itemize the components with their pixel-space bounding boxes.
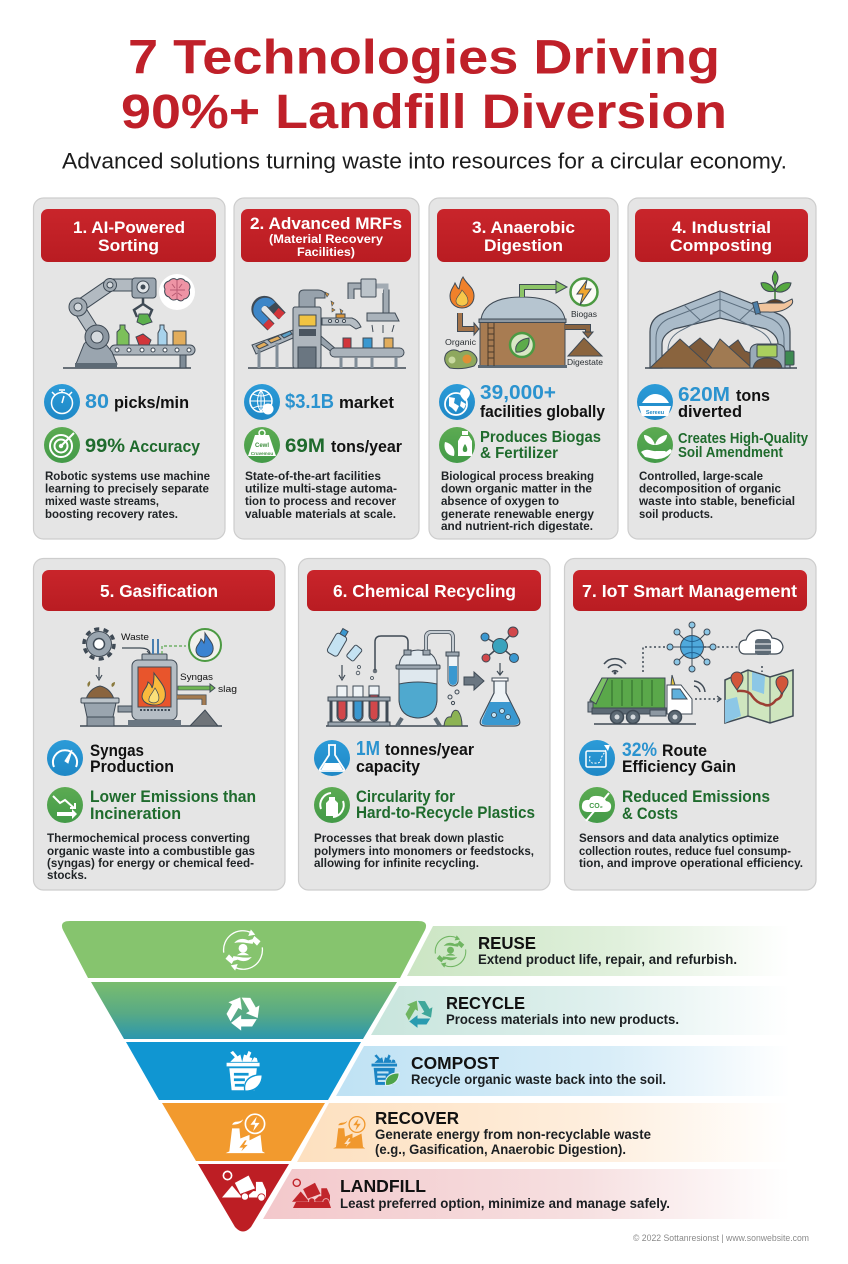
heading: IoT Smart Management — [573, 570, 807, 611]
illustration: gasifier furnace: Syngas — [180, 672, 213, 683]
heading: Anaerobic Digestion: Digestion — [484, 236, 563, 255]
description: tion, and improve operational efficiency. — [579, 856, 803, 870]
illustration: anaerobic digester tank — [445, 277, 603, 369]
stat: 32% Route Efficiency Gain: Route — [662, 741, 707, 760]
level: RECYCLE: RECYCLE — [446, 993, 525, 1013]
heading: Advanced MRFs: 2. Advanced MRFs — [250, 214, 402, 233]
stat: 1M tonnes/year capacity: tonnes/year — [385, 740, 474, 759]
level: RECOVER: RECOVER — [375, 1108, 459, 1128]
stat: 80 picks/min: picks/min — [114, 393, 189, 412]
panel: 7. IoT Smart Management — [564, 558, 816, 890]
description — [314, 831, 534, 870]
description: Biological process breaking — [441, 469, 594, 483]
description — [441, 469, 594, 533]
panel: 2. Advanced MRFs — [234, 198, 419, 539]
illustration: material recovery facility — [248, 279, 406, 368]
stat: 99% Accuracy: 99% — [85, 435, 125, 457]
stat: Circularity for Hard-to-Recycle Plastics: Hard-to-Recycle Plastics — [356, 804, 535, 822]
stat: 620M tons diverted: 620M — [678, 384, 730, 406]
stat: Produces Biogas & Fertilizer — [439, 427, 601, 463]
stat: 1M tonnes/year capacity: capacity — [356, 757, 421, 776]
stat: Syngas Production — [47, 740, 174, 776]
stat: 69M tons/year: 69M — [285, 435, 325, 457]
stat: 620M tons diverted — [637, 384, 770, 421]
heading: Advanced MRFs — [241, 209, 411, 262]
description: allowing for infinite recycling. — [314, 856, 479, 870]
stat: Creates High-Quality Soil Amendment: Soil Amendment — [678, 445, 783, 461]
band: recycle — [91, 982, 397, 1039]
description: utilize multi-stage automa- — [245, 482, 397, 496]
stat: 32% Route Efficiency Gain: 32% — [622, 740, 657, 761]
level: RECOVER — [297, 1103, 790, 1162]
stat: Reduced Emissions & Costs: Reduced Emissions — [622, 788, 770, 806]
footer: © 2022 Sottanresionst | www.sonwebsite.com — [633, 1233, 809, 1244]
illustration: gasifier furnace — [80, 629, 237, 726]
stat: 80 picks/min — [44, 384, 189, 420]
description: State-of-the-art facilities — [245, 469, 381, 483]
stat: 69M tons/year: Cewl — [255, 443, 269, 449]
illustration: gasifier furnace: slag — [218, 684, 237, 695]
illustration: anaerobic digester tank: Organic — [445, 337, 477, 347]
level: RECOVER: Generate energy from non-recyclable waste — [375, 1126, 651, 1142]
heading: Chemical Recycling: 6. Chemical Recycling — [333, 581, 516, 601]
stat: $3.1B market: market — [339, 393, 394, 412]
title — [121, 30, 727, 139]
stat: 80 picks/min: 80 — [85, 391, 109, 413]
illustration: robot arm sorting on conveyor — [63, 274, 195, 368]
description: Processes that break down plastic — [314, 831, 504, 845]
heading: Industrial Composting — [635, 209, 808, 262]
description: soil products. — [639, 507, 713, 521]
stat: $3.1B market — [244, 384, 394, 420]
description: Thermochemical process converting — [47, 831, 250, 845]
level: LANDFILL: Least preferred option, minimize and manage safely. — [340, 1195, 670, 1211]
stat: 99% Accuracy: Accuracy — [129, 438, 201, 456]
stat: Reduced Emissions & Costs: & Costs — [622, 805, 678, 823]
level: COMPOST: COMPOST — [411, 1053, 499, 1073]
band: reuse — [62, 921, 426, 978]
description: waste into stable, beneficial — [638, 494, 795, 508]
description: Robotic systems use machine — [45, 469, 210, 483]
stat: 39,000+ facilities globally: facilities globally — [480, 402, 605, 421]
level: RECYCLE — [371, 986, 790, 1035]
level: REUSE: REUSE — [478, 933, 536, 953]
stat: Creates High-Quality Soil Amendment — [637, 427, 808, 463]
description — [579, 831, 803, 870]
description — [638, 469, 795, 521]
stat: Produces Biogas & Fertilizer: & Fertilizer — [480, 445, 558, 462]
panel: 5. Gasification — [34, 558, 285, 890]
heading: Gasification — [42, 570, 275, 611]
illustration: compost hangar with plant in hand — [645, 271, 797, 368]
title: 7 Technologies Driving — [128, 30, 720, 84]
stat: Lower Emissions than Incineration — [47, 787, 256, 823]
level: COMPOST: Recycle organic waste back into the soil. — [411, 1071, 666, 1087]
heading: Advanced MRFs: Facilities) — [297, 245, 355, 259]
band: landfill — [198, 1164, 289, 1232]
stat: Circularity for Hard-to-Recycle Plastics: Circularity for — [356, 788, 456, 806]
heading: Anaerobic Digestion — [437, 209, 610, 262]
stat: 69M tons/year — [244, 427, 402, 463]
illustration: anaerobic digester tank: Biogas — [571, 309, 597, 319]
stat: 1M tonnes/year capacity: 1M — [356, 738, 380, 760]
panel: 1. AI-Powered Sorting — [34, 198, 225, 539]
heading: Chemical Recycling — [307, 570, 541, 611]
stat: Reduced Emissions & Costs: CO₂ — [589, 803, 603, 810]
panel: 4. Industrial Composting — [628, 198, 816, 539]
description: Controlled, large-scale — [639, 469, 763, 483]
stat: Syngas Production: Syngas — [90, 741, 144, 760]
stat: Circularity for Hard-to-Recycle Plastics — [314, 787, 535, 823]
level: LANDFILL — [263, 1169, 790, 1219]
stat: Syngas Production: Production — [90, 757, 174, 776]
description: absence of oxygen to — [441, 494, 559, 508]
heading: Industrial Composting: 4. Industrial — [672, 218, 771, 237]
illustration: anaerobic digester tank: Digestate — [567, 357, 603, 367]
stat: 620M tons diverted: tons — [736, 386, 770, 405]
description: collection routes, reduce fuel consump- — [579, 844, 791, 858]
description: tion to process and recover — [245, 494, 396, 508]
stat: 69M tons/year: Cruvemou — [251, 451, 273, 456]
panel: 3. Anaerobic Digestion — [429, 198, 618, 539]
level: REUSE — [407, 926, 790, 976]
stat: Produces Biogas & Fertilizer: Produces Biogas — [480, 429, 601, 446]
description: learning to precisely separate — [45, 482, 209, 496]
stat: 620M tons diverted: diverted — [678, 402, 742, 421]
description: generate renewable energy — [441, 507, 594, 521]
chart: waste hierarchy inverted pyramid — [62, 921, 426, 1232]
heading: Anaerobic Digestion: 3. Anaerobic — [472, 218, 575, 237]
stat: 99% Accuracy — [44, 427, 201, 463]
description — [245, 469, 397, 521]
description: organic waste into a combustible gas — [47, 844, 255, 858]
heading: Advanced MRFs: (Material Recovery — [269, 232, 383, 246]
level: COMPOST — [336, 1046, 790, 1096]
description — [45, 469, 210, 521]
level: RECOVER: (e.g., Gasification, Anaerobic Digestion). — [375, 1141, 626, 1157]
illustration: chemical reactor and molecule — [326, 627, 520, 726]
panel: 6. Chemical Recycling — [298, 558, 550, 890]
stat: Creates High-Quality Soil Amendment: Creates High-Quality — [678, 431, 808, 447]
stat: 69M tons/year: tons/year — [331, 437, 402, 456]
description: polymers into monomers or feedstocks, — [314, 844, 534, 858]
stat: 1M tonnes/year capacity — [314, 738, 474, 776]
description: valuable materials at scale. — [245, 507, 396, 521]
heading: AI-Powered Sorting — [41, 209, 216, 262]
title: 90%+ Landfill Diversion — [121, 85, 727, 139]
stat: 39,000+ facilities globally: 39,000+ — [480, 382, 556, 404]
heading: AI-Powered Sorting: Sorting — [98, 236, 159, 255]
stat: 32% Route Efficiency Gain: Efficiency Gain — [622, 757, 736, 776]
band: compost — [126, 1042, 361, 1100]
heading: Gasification: 5. Gasification — [100, 581, 218, 601]
description: and nutrient-rich digestate. — [441, 519, 593, 533]
description: mixed waste streams, — [45, 494, 159, 508]
description: Sensors and data analytics optimize — [579, 831, 779, 845]
illustration: smart garbage truck and route map — [588, 622, 793, 724]
description: down organic matter in the — [441, 482, 592, 496]
illustration: gasifier furnace: Waste — [121, 632, 149, 643]
description: (syngas) for energy or chemical feed- — [47, 856, 254, 870]
heading: IoT Smart Management: 7. IoT Smart Management — [582, 581, 797, 601]
level: RECYCLE: Process materials into new products. — [446, 1011, 679, 1027]
stat: Lower Emissions than Incineration: Incineration — [90, 805, 181, 823]
description: decomposition of organic — [639, 482, 781, 496]
stat: Lower Emissions than Incineration: Lower Emissions than — [90, 788, 256, 806]
description: stocks. — [47, 868, 87, 882]
subtitle: Advanced solutions turning waste into resources for a circular economy. — [62, 148, 787, 174]
band: recover — [162, 1103, 325, 1161]
description: boosting recovery rates. — [45, 507, 178, 521]
stat: Reduced Emissions & Costs — [579, 787, 770, 823]
stat: 32% Route Efficiency Gain — [579, 740, 736, 776]
level: LANDFILL: LANDFILL — [340, 1176, 426, 1196]
level: REUSE: Extend product life, repair, and refurbish. — [478, 951, 737, 967]
stat: $3.1B market: $3.1B — [285, 391, 334, 413]
heading: AI-Powered Sorting: 1. AI-Powered — [73, 218, 185, 237]
stat: 620M tons diverted: Sereeu — [646, 410, 664, 416]
heading: Industrial Composting: Composting — [670, 236, 772, 255]
description — [47, 831, 255, 882]
stat: 39,000+ facilities globally — [439, 382, 605, 421]
